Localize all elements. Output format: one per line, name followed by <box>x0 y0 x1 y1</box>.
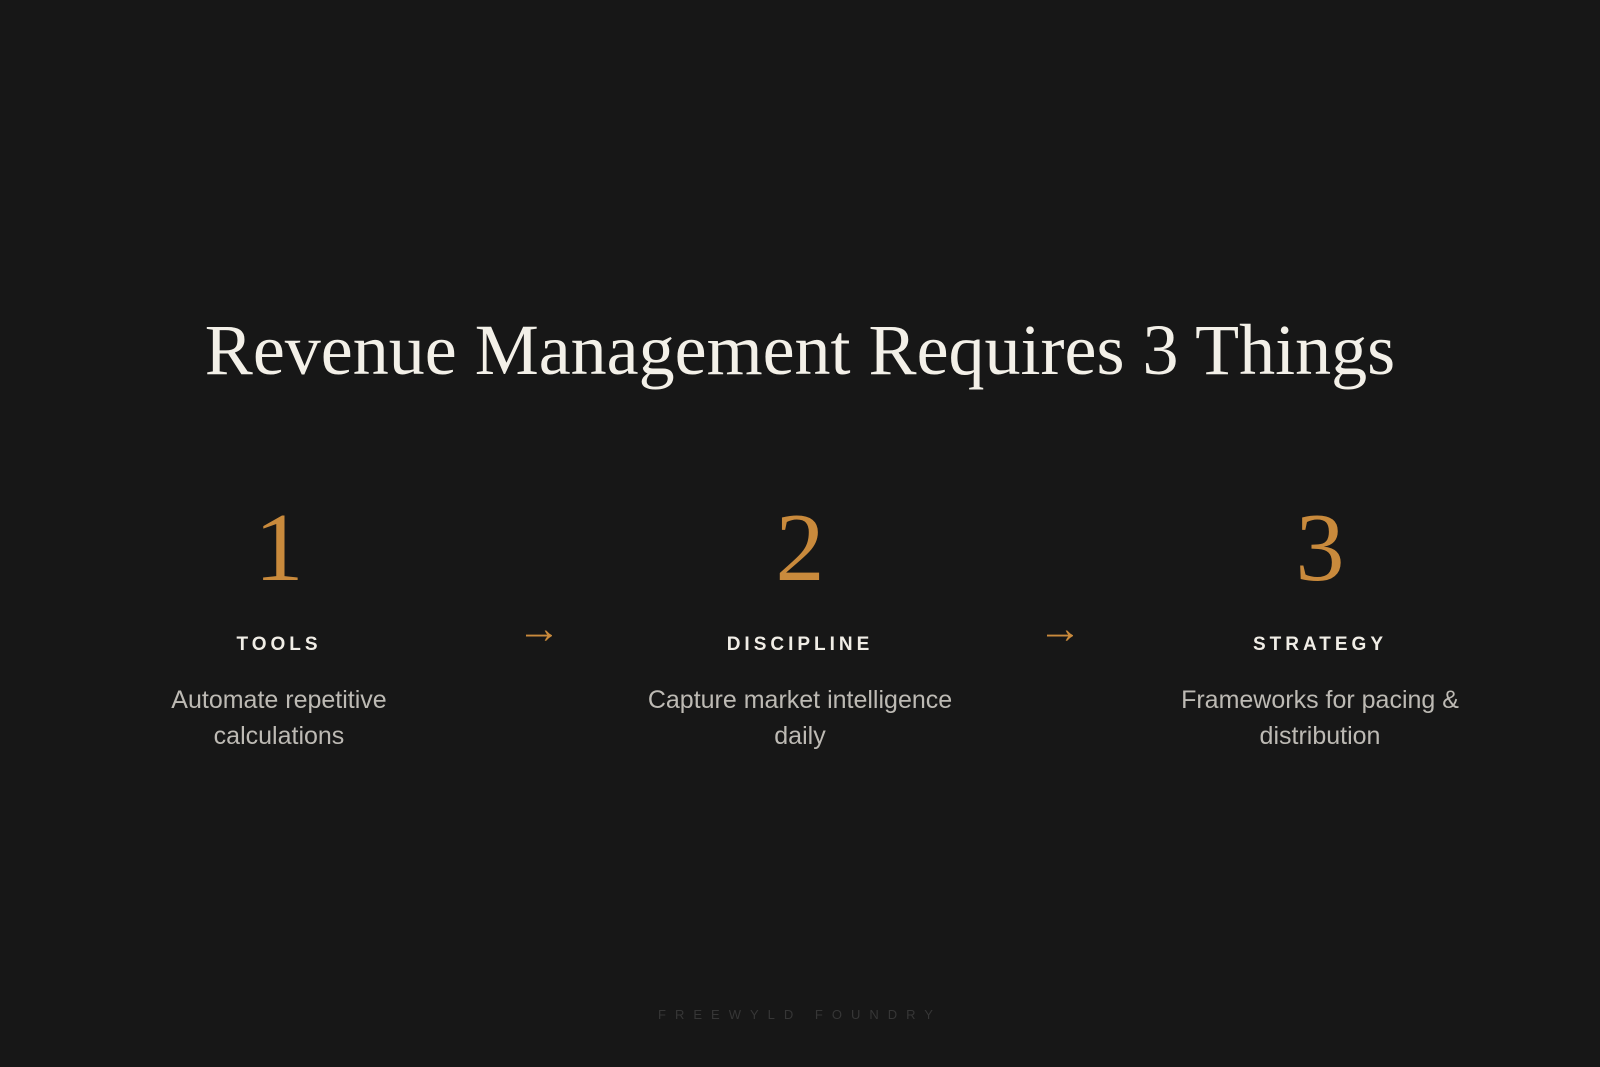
column: tools <box>171 494 387 750</box>
label: discipline: DISCIPLINE <box>727 634 873 655</box>
description: discipline: daily <box>774 722 826 750</box>
description: tools: Automate repetitive <box>171 686 387 714</box>
description: strategy: Frameworks for pacing & <box>1181 686 1459 714</box>
footer: FREEWYLD FOUNDRY <box>658 1007 942 1022</box>
number 3: 3 <box>1296 494 1344 602</box>
description: tools <box>171 686 387 750</box>
description: discipline <box>648 686 952 750</box>
description: discipline: Capture market intelligence <box>648 686 952 714</box>
description: strategy: distribution <box>1260 722 1380 750</box>
arrow 2: → <box>1038 604 1082 653</box>
label: tools: TOOLS <box>236 634 322 655</box>
title: Revenue Management Requires 3 Things <box>205 310 1395 390</box>
arrow 1: → <box>517 604 561 653</box>
column: discipline <box>648 494 952 750</box>
label: strategy: STRATEGY <box>1253 634 1387 655</box>
description: strategy <box>1181 686 1459 750</box>
number 2: 2 <box>776 494 824 602</box>
number 1: 1 <box>254 494 304 602</box>
column: strategy <box>1181 494 1459 750</box>
description: tools: calculations <box>214 722 344 750</box>
